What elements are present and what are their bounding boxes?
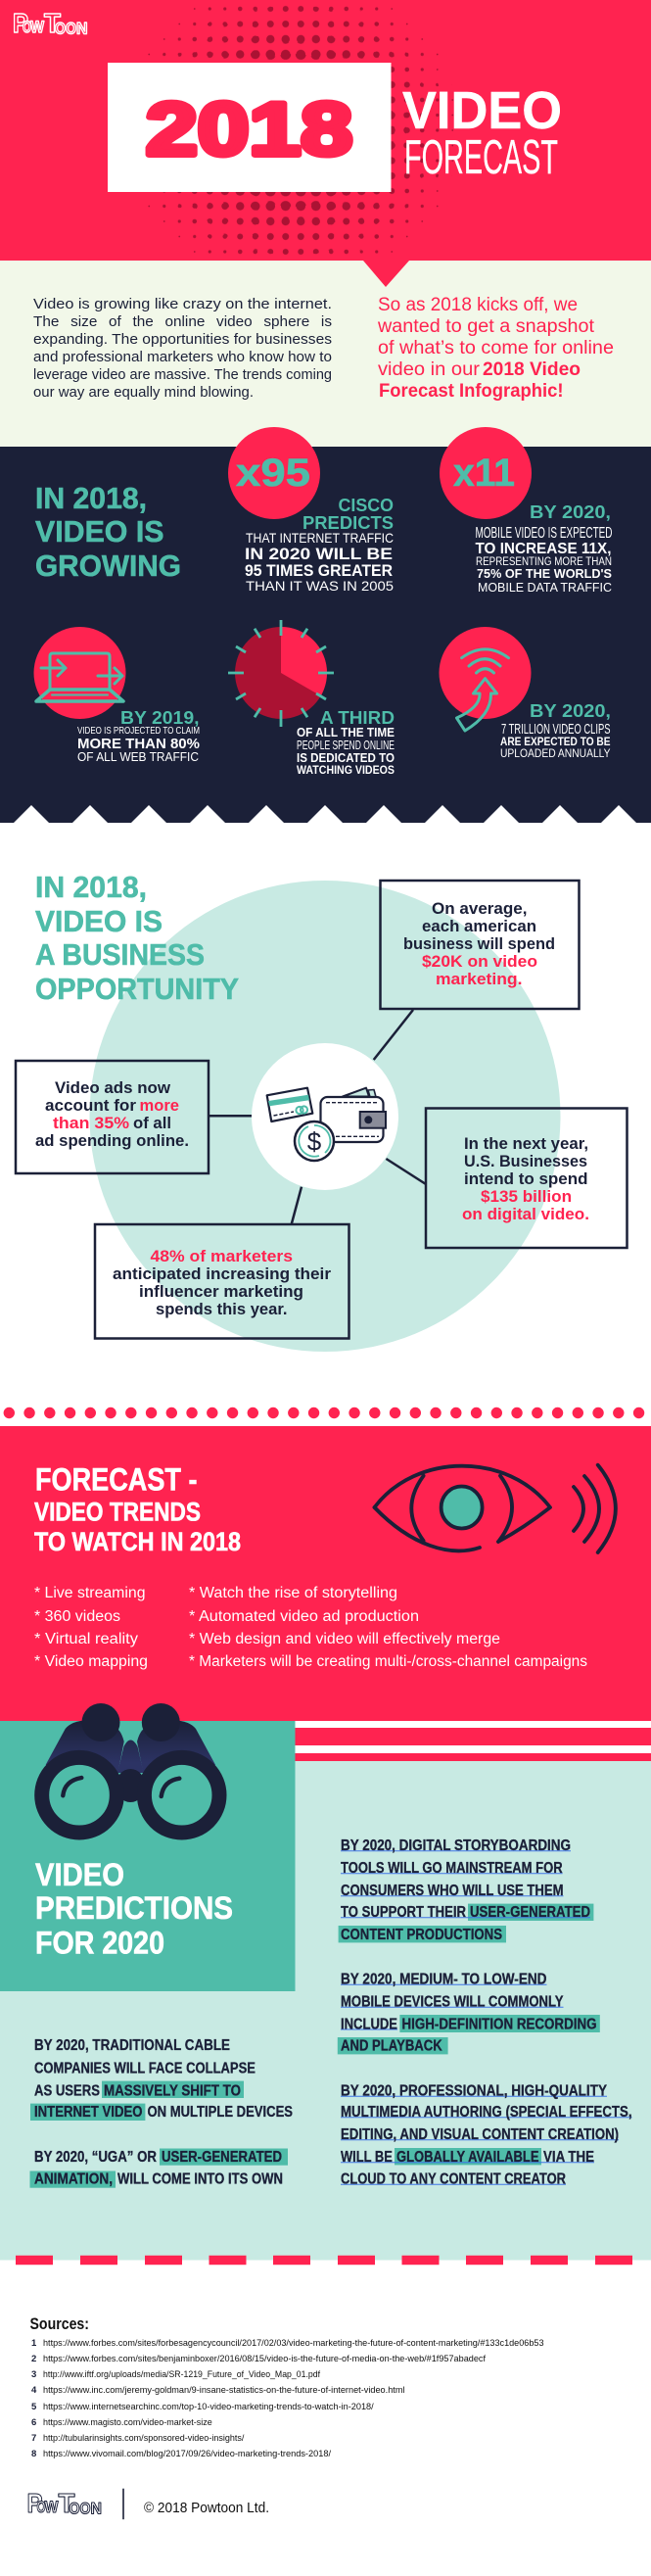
- sources heading: Sources:: [29, 2314, 89, 2333]
- sources: [29, 2314, 544, 2459]
- text: right predictions: BY 2020, MEDIUM- TO LOW-END: [341, 1971, 546, 1988]
- callout: 135 billion: In the next year,: [464, 1134, 588, 1153]
- icon: clock pie: [228, 620, 334, 727]
- text: left predictions: AS USERS: [34, 2082, 100, 2100]
- heading: forecast: [34, 1461, 241, 1556]
- panel: forecast trends: [0, 1426, 651, 1721]
- callout: 20K: marketing.: [436, 970, 523, 988]
- sources list: 8: [31, 2449, 36, 2459]
- callout: 35 percent: than 35%: [53, 1114, 129, 1132]
- logo: Powtoon: O: [55, 20, 66, 37]
- stat: x95: [236, 452, 394, 594]
- callout: 20K: business will spend: [403, 934, 555, 953]
- intro text left: [33, 297, 332, 401]
- heading: in 2018 video is growing: GROWING: [35, 549, 181, 583]
- intro text left: expanding. The opportunities for businesses: [33, 332, 332, 348]
- text: right predictions: USER-GENERATED: [470, 1904, 590, 1921]
- stat: x95: 95 TIMES GREATER: [245, 561, 393, 580]
- text: left predictions: ANIMATION,: [34, 2171, 113, 2188]
- stat: x95: IN 2020 WILL BE: [245, 545, 393, 563]
- text: right predictions: WILL BE: [341, 2149, 393, 2166]
- intro text right: So as 2018 kicks off, we: [378, 295, 578, 315]
- callout: 48 percent: 48% of marketers: [151, 1247, 293, 1265]
- stat: x95: THAT INTERNET TRAFFIC: [246, 530, 394, 546]
- title: video forecast: [402, 81, 562, 184]
- stat: x95: x95: [236, 452, 310, 495]
- list: trends: * Live streaming: [34, 1585, 145, 1601]
- stat: a third: A THIRD: [320, 708, 395, 728]
- logo: Powtoon: O: [23, 18, 31, 36]
- sources list: 5: [31, 2402, 37, 2412]
- callout: 135 billion: $135 billion: [481, 1187, 572, 1206]
- text: right predictions: TO SUPPORT THEIR: [341, 1904, 466, 1921]
- heading: business opportunity: A BUSINESS: [35, 937, 205, 972]
- stat: a third: OF ALL THE TIME: [297, 726, 395, 739]
- text: right predictions: [341, 1837, 632, 2188]
- heading: business opportunity: [35, 870, 239, 1006]
- callout: 48 percent: influencer marketing: [139, 1282, 303, 1301]
- list: trends: * Web design and video will effectively merge: [189, 1631, 500, 1647]
- callout: 35 percent: Video ads now: [55, 1078, 171, 1097]
- dashed divider: [16, 2256, 632, 2265]
- stat: 7 trillion clips: [500, 701, 611, 760]
- heading: business opportunity: VIDEO IS: [35, 904, 163, 938]
- stat: by 2019: BY 2019,: [120, 708, 200, 728]
- logo: Powtoon: T: [44, 8, 61, 38]
- icon: eye: [374, 1465, 616, 1552]
- speech pointer: [363, 261, 409, 287]
- icon: wifi upload: [439, 627, 531, 731]
- footer logo: W: [45, 2498, 59, 2516]
- icon: laptop: [33, 627, 125, 719]
- callout: 48 percent: spends this year.: [156, 1300, 288, 1318]
- logo: Powtoon: O: [66, 20, 76, 37]
- big circle: [90, 881, 560, 1352]
- intro text right: of what’s to come for online: [378, 338, 614, 358]
- list: trends: * Automated video ad production: [189, 1608, 419, 1625]
- sources list: https://www.vivomail.com/blog/2017/09/26/video-marketing-trends-2018/: [43, 2449, 331, 2459]
- heading: in 2018 video is growing: IN 2018,: [35, 481, 147, 515]
- callout: 20K: On average,: [432, 899, 527, 918]
- stripes: [296, 1721, 651, 1761]
- heading: in 2018 video is growing: VIDEO IS: [35, 514, 164, 549]
- text: left predictions: [34, 2037, 293, 2188]
- title: video forecast: VIDEO: [402, 81, 562, 140]
- logo: Powtoon: [13, 8, 88, 38]
- list: trends: [34, 1585, 587, 1670]
- callout: 20K: [380, 881, 580, 1009]
- text: right predictions: CONSUMERS WHO WILL USE THEM: [341, 1883, 564, 1899]
- heading: business opportunity: IN 2018,: [35, 870, 147, 904]
- stat: a third: WATCHING VIDEOS: [297, 765, 395, 777]
- text: right predictions: GLOBALLY AVAILABLE: [396, 2149, 538, 2166]
- stat: x11: x11: [453, 452, 515, 495]
- sources list: http://tubularinsights.com/sponsored-video-insights/: [43, 2433, 245, 2444]
- heading: forecast: TO WATCH IN 2018: [34, 1527, 241, 1556]
- copyright: © 2018 Powtoon Ltd.: [144, 2500, 269, 2516]
- sources list: 2: [31, 2354, 36, 2364]
- callout: 48 percent: anticipated increasing their: [113, 1264, 331, 1283]
- footer logo: O: [69, 2500, 80, 2517]
- list: trends: * Video mapping: [34, 1653, 148, 1670]
- heading block: FOR 2020: [35, 1926, 164, 1961]
- callout: 35 percent: more: [139, 1096, 179, 1115]
- text: left predictions: USER-GENERATED: [162, 2149, 282, 2166]
- text: right predictions: TOOLS WILL GO MAINSTREAM FOR: [341, 1860, 563, 1877]
- footer logo: O: [80, 2500, 90, 2517]
- panel: business opportunity: [16, 870, 627, 1352]
- stat: x11: TO INCREASE 11X,: [476, 541, 611, 557]
- intro text left: leverage video are massive. The trends coming: [33, 367, 332, 383]
- sources list: https://www.magisto.com/video-market-size: [43, 2417, 212, 2428]
- stat: a third: IS DEDICATED TO: [297, 751, 395, 765]
- title box: 2018: 2018: [146, 88, 352, 171]
- stat: x95: PREDICTS: [302, 513, 394, 533]
- heading block: [0, 1721, 296, 1991]
- callout: 20K: each american: [422, 917, 536, 935]
- heading: in 2018 video is growing: [35, 481, 181, 583]
- title box: 2018: [108, 63, 392, 192]
- sources list: http://www.iftf.org/uploads/media/SR-1219_Future_of_Video_Map_01.pdf: [43, 2369, 320, 2380]
- stat: x11: BY 2020,: [530, 502, 611, 522]
- sources list: 4: [31, 2385, 37, 2396]
- stat: by 2019: [77, 708, 200, 764]
- callout: 135 billion: U.S. Businesses: [464, 1152, 587, 1170]
- sources list: https://www.internetsearchinc.com/top-10-video-marketing-trends-to-watch-in-2018/: [43, 2402, 374, 2412]
- logo: Powtoon: P: [13, 8, 28, 38]
- stat: by 2019: MORE THAN 80%: [77, 736, 200, 752]
- panel: video is growing: [0, 427, 651, 823]
- footer logo: P: [27, 2488, 43, 2518]
- callout: 48 percent: [95, 1224, 349, 1338]
- highlights: [29, 1904, 600, 2188]
- stat: 7 trillion clips: BY 2020,: [530, 701, 611, 721]
- heading block: VIDEO: [35, 1857, 124, 1892]
- intro text left: Video is growing like crazy on the internet.: [33, 297, 332, 312]
- sources list: 6: [31, 2417, 36, 2428]
- heading block: PREDICTIONS: [35, 1890, 233, 1926]
- sources list: https://www.forbes.com/sites/forbesagencycouncil/2017/02/03/video-marketing-the-future-of-content-marketing/#133c1de06b53: [43, 2338, 544, 2349]
- coin: $: [307, 1126, 322, 1156]
- stat: by 2019: OF ALL WEB TRAFFIC: [77, 750, 199, 764]
- intro text left: and professional marketers who know how to: [33, 350, 332, 365]
- text: left predictions: INTERNET VIDEO: [34, 2104, 143, 2121]
- halftone dots: [129, 0, 458, 295]
- white teeth: [14, 805, 636, 823]
- credit card: [267, 1088, 312, 1121]
- footer logo: O: [37, 2498, 45, 2516]
- stat: by 2019: VIDEO IS PROJECTED TO CLAIM: [77, 725, 200, 737]
- text: right predictions: CLOUD TO ANY CONTENT CREATOR: [341, 2171, 566, 2188]
- sources list: 3: [31, 2369, 36, 2380]
- stat: x11: 75% OF THE WORLD'S: [477, 567, 612, 581]
- intro text right: Forecast Infographic!: [379, 381, 564, 402]
- callout: 135 billion: intend to spend: [464, 1169, 587, 1188]
- intro text right: video in our: [378, 359, 481, 380]
- footer logo: T: [59, 2488, 74, 2518]
- stat: x11: [453, 452, 613, 595]
- header panel: [0, 0, 651, 295]
- intro text left: our way are equally mind blowing.: [33, 385, 254, 401]
- stat: x95: CISCO: [339, 496, 394, 515]
- logo: Powtoon: W: [30, 18, 45, 36]
- stat: x11: MOBILE DATA TRAFFIC: [478, 580, 612, 595]
- text: left predictions: BY 2020, “UGA” OR: [34, 2149, 157, 2166]
- footer logo: N: [90, 2500, 102, 2517]
- text: right predictions: HIGH-DEFINITION RECORDING: [401, 2016, 597, 2032]
- footer divider: [122, 2489, 124, 2519]
- list: trends: * Watch the rise of storytelling: [189, 1585, 397, 1601]
- callout: 35 percent: account for: [45, 1096, 136, 1115]
- stat: 7 trillion clips: UPLOADED ANNUALLY: [500, 748, 611, 760]
- text: left predictions: ON MULTIPLE DEVICES: [147, 2104, 293, 2121]
- heading: forecast: FORECAST -: [35, 1461, 198, 1497]
- stat: a third: [297, 708, 395, 777]
- sources list: [31, 2338, 544, 2459]
- underlines: [341, 1851, 632, 2184]
- callout: 135 billion: on digital video.: [462, 1205, 589, 1223]
- callout: 35 percent: ad spending online.: [35, 1131, 189, 1150]
- text: right predictions: INCLUDE: [341, 2016, 397, 2032]
- callout: 35 percent: of all: [133, 1114, 171, 1132]
- icon: binoculars: [42, 1703, 219, 1833]
- intro text left: The size of the online video sphere is: [33, 314, 332, 330]
- list: trends: * Marketers will be creating multi-/cross-channel campaigns: [189, 1653, 587, 1670]
- text: right predictions: VIA THE: [543, 2149, 594, 2166]
- intro panel: [0, 261, 651, 447]
- panel: predictions: [0, 1703, 651, 2261]
- sources list: https://www.inc.com/jeremy-goldman/9-insane-statistics-on-the-future-of-internet-video.html: [43, 2385, 405, 2396]
- callout: 135 billion: [426, 1109, 627, 1248]
- callout: 20K: $20K on video: [422, 952, 537, 971]
- heading: business opportunity: OPPORTUNITY: [35, 972, 239, 1006]
- callout: 35 percent: [16, 1061, 209, 1173]
- intro text right: wanted to get a snapshot: [377, 316, 595, 337]
- heading: forecast: VIDEO TRENDS: [34, 1497, 201, 1526]
- text: left predictions: COMPANIES WILL FACE COLLAPSE: [34, 2061, 256, 2076]
- text: right predictions: BY 2020, DIGITAL STORYBOARDING: [341, 1837, 571, 1854]
- intro text right: 2018 Video: [483, 359, 581, 380]
- logo: Powtoon: N: [76, 20, 88, 37]
- dotted divider: [9, 1407, 641, 1418]
- intro text right: [377, 295, 614, 402]
- text: right predictions: CONTENT PRODUCTIONS: [341, 1927, 502, 1943]
- text: right predictions: MOBILE DEVICES WILL COMMONLY: [341, 1994, 564, 2010]
- text: left predictions: BY 2020, TRADITIONAL CABLE: [34, 2037, 230, 2054]
- list: trends: * 360 videos: [34, 1608, 120, 1625]
- connector lines: [209, 1010, 426, 1224]
- footer: [27, 2488, 269, 2519]
- text: right predictions: BY 2020, PROFESSIONAL, HIGH-QUALITY: [341, 2082, 608, 2100]
- text: left predictions: MASSIVELY SHIFT TO: [104, 2082, 241, 2100]
- stat: x11: REPRESENTING MORE THAN: [476, 556, 612, 568]
- text: left predictions: WILL COME INTO ITS OWN: [117, 2171, 283, 2188]
- icon: money: [267, 1088, 386, 1161]
- sources list: 1: [31, 2338, 37, 2349]
- circles x95 and x11: [228, 427, 532, 519]
- center white circle: [252, 1043, 398, 1190]
- sources list: https://www.forbes.com/sites/benjaminboxer/2016/08/15/video-is-the-future-of-media-on-the-web/#1f957abadecf: [43, 2354, 486, 2364]
- stat: a third: PEOPLE SPEND ONLINE: [297, 738, 395, 752]
- stat: 7 trillion clips: ARE EXPECTED TO BE: [500, 737, 611, 748]
- list: trends: * Virtual reality: [34, 1631, 138, 1647]
- footer logo: [27, 2488, 102, 2518]
- stat: x95: THAN IT WAS IN 2005: [246, 578, 394, 594]
- sources list: 7: [31, 2433, 36, 2444]
- text: right predictions: AND PLAYBACK: [341, 2038, 442, 2055]
- wallet: [321, 1088, 386, 1142]
